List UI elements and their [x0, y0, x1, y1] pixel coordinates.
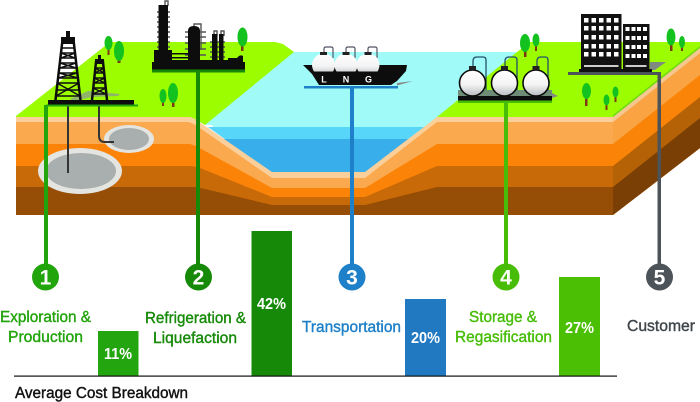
soil side face	[613, 47, 700, 215]
well pipes	[68, 105, 114, 173]
label: storage and regasification	[455, 309, 552, 346]
ground edge highlight	[613, 46, 700, 117]
reservoir: small	[104, 125, 154, 153]
chart caption: Average Cost Breakdown	[15, 385, 188, 402]
bar: 11%: 11%	[104, 346, 132, 363]
icon: oil derricks	[46, 31, 138, 106]
step 2 badge	[185, 264, 212, 290]
step 5 badge	[646, 264, 673, 290]
label: refrigeration and liquefaction: Liquefaction	[153, 330, 237, 347]
bar: 20%: 20%	[411, 330, 440, 347]
icon: LNG ship: G	[365, 74, 372, 84]
axis line	[14, 376, 617, 377]
icon: LNG ship: N	[343, 74, 349, 84]
icon: LNG ship: L	[321, 74, 327, 84]
icon: liquefaction plant	[152, 1, 245, 72]
bar: 27%: 27%	[565, 320, 594, 337]
label: refrigeration and liquefaction	[145, 310, 246, 347]
water surface	[205, 52, 525, 125]
leader line 3	[350, 87, 354, 265]
step 2 badge: 2	[193, 266, 204, 290]
bar: 42%: 42%	[257, 296, 286, 313]
label: storage and regasification: Storage &	[469, 309, 537, 326]
bar chart	[14, 231, 617, 377]
icon: city buildings	[568, 14, 666, 75]
step 3 badge: 3	[346, 266, 358, 290]
right ground	[437, 42, 700, 117]
left ground	[16, 42, 294, 125]
reservoir: large	[38, 148, 122, 194]
leader line 1	[44, 105, 48, 265]
label: exploration and production: Exploration &	[0, 309, 91, 326]
step 5 badge: 5	[654, 266, 666, 290]
step 3 badge	[338, 264, 366, 290]
label: exploration and production	[0, 309, 91, 346]
landscape cross-section	[16, 42, 700, 215]
trees	[104, 28, 685, 110]
bar: 20%	[405, 299, 446, 376]
step 4 badge	[492, 264, 520, 290]
leader line 4	[504, 100, 508, 265]
bar: 27%	[559, 277, 600, 376]
bar: 42%	[252, 231, 292, 376]
step 4 badge: 4	[500, 266, 512, 290]
step 1 badge: 1	[40, 266, 52, 290]
label: refrigeration and liquefaction: Refrigeration &	[145, 310, 246, 327]
icon: LNG ship	[303, 47, 413, 88]
leader line 5	[658, 73, 661, 265]
soil front face	[16, 117, 613, 215]
label: customer: Customer	[627, 318, 695, 335]
icon: storage spheres	[458, 57, 558, 103]
leader line 2	[196, 70, 200, 265]
bar: 11%	[98, 331, 138, 376]
label: transportation: Transportation	[302, 319, 401, 336]
label: exploration and production: Production	[8, 329, 83, 346]
water layers	[205, 120, 437, 173]
label: storage and regasification: Regasification	[455, 329, 552, 346]
step 1 badge	[32, 264, 59, 290]
